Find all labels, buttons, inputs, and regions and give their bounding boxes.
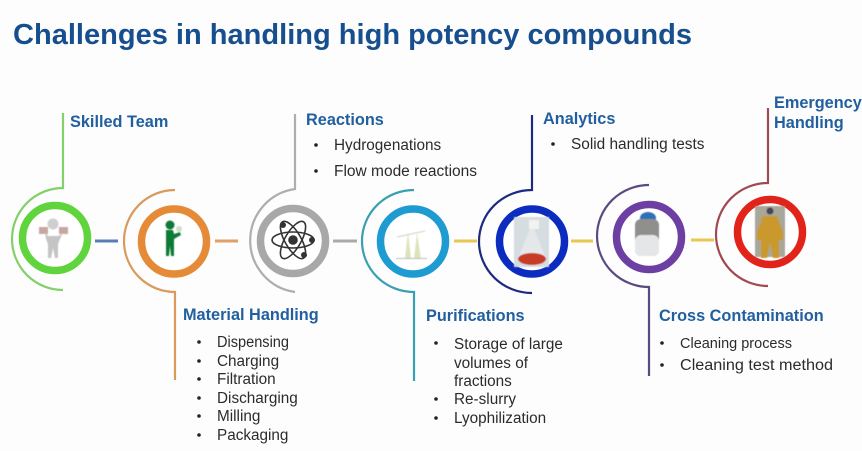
list: reactions: [314, 137, 477, 180]
bracket: emergency handling: [716, 108, 768, 286]
list: material handling: Packaging: [217, 427, 288, 444]
icon: atom: [272, 218, 314, 262]
list: purifications: Re-slurry: [454, 391, 516, 408]
list: material handling: Filtration: [217, 371, 276, 388]
connector: cross contamination to emergency handling: [691, 238, 714, 242]
step: cross contamination: [597, 185, 833, 376]
list: purifications: fractions: [454, 373, 512, 390]
connector: skilled team to material handling: [95, 240, 118, 242]
list: material handling: Milling: [217, 408, 260, 425]
bracket: reactions: [250, 114, 295, 292]
step: emergency handling: [716, 94, 862, 286]
connector: purifications to analytics: [454, 240, 477, 242]
list: reactions: Flow mode reactions: [334, 163, 477, 180]
ring: analytics: [500, 209, 564, 274]
list: cross contamination: Cleaning process: [680, 335, 792, 352]
heading: emergency handling: Emergency: [774, 94, 862, 112]
title: Challenges in handling high potency compounds: [13, 19, 692, 51]
icon: reaction flask: [514, 217, 549, 267]
bracket: material handling: [124, 190, 175, 380]
list: material handling: Charging: [217, 353, 279, 370]
bracket: cross contamination: [597, 185, 649, 376]
ring: reactions: [260, 208, 326, 274]
icon: person holding signs: [39, 218, 68, 258]
icon: person in protective suit: [755, 206, 785, 258]
heading: analytics: Analytics: [543, 110, 615, 128]
list: reactions: Hydrogenations: [334, 137, 441, 154]
heading: material handling: Material Handling: [183, 306, 319, 324]
list: cross contamination: Cleaning test method: [680, 357, 833, 374]
bracket: purifications: [362, 190, 414, 381]
step: purifications: [362, 190, 563, 427]
connector: analytics to cross contamination: [571, 240, 593, 242]
step: material handling: [124, 190, 319, 444]
list: purifications: Lyophilization: [454, 410, 546, 427]
list: cross contamination: [660, 335, 833, 374]
ring: skilled team: [22, 206, 88, 270]
icon: container drum: [635, 212, 659, 256]
ring: emergency handling: [738, 200, 802, 264]
list: analytics: Solid handling tests: [571, 136, 705, 153]
bracket: analytics: [479, 115, 532, 293]
ring: material handling: [142, 209, 206, 274]
heading: cross contamination: Cross Contamination: [659, 307, 824, 325]
step: analytics: [479, 110, 705, 293]
list: material handling: Discharging: [217, 390, 298, 407]
step: skilled team: [12, 113, 168, 290]
list: material handling: Dispensing: [217, 334, 289, 351]
step: emergency handling: Handling: [774, 114, 844, 132]
list: purifications: volumes of: [454, 355, 529, 372]
icon: green figure: [166, 220, 182, 256]
list: material handling: [197, 334, 298, 444]
heading: skilled team: Skilled Team: [70, 113, 168, 131]
step: reactions: [250, 111, 477, 292]
ring: purifications: [380, 209, 446, 274]
list: purifications: Storage of large: [454, 336, 563, 353]
connector: reactions to purifications: [333, 240, 357, 242]
heading: purifications: Purifications: [426, 307, 525, 325]
heading: reactions: Reactions: [306, 111, 384, 129]
bracket: skilled team: [12, 113, 63, 290]
list: purifications: [434, 336, 563, 427]
connector: material handling to reactions: [215, 240, 238, 242]
ring: cross contamination: [616, 204, 682, 270]
icon: chromatogram: [396, 231, 428, 259]
